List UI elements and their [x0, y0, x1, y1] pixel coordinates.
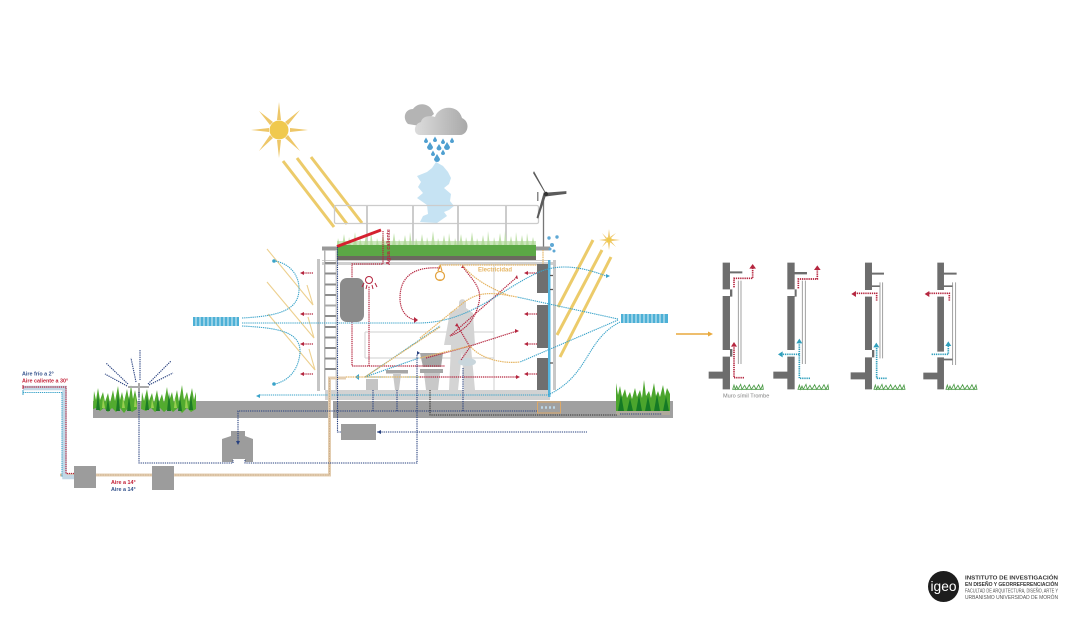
hot water circuit [352, 231, 518, 377]
sink [458, 358, 476, 366]
label: hot air: Aire caliente a 30° [22, 378, 68, 384]
green roof [322, 231, 556, 265]
filter in ground [538, 402, 560, 413]
sun rays onto facade [557, 240, 611, 357]
geothermal box 2 [152, 466, 174, 490]
water cistern [222, 431, 253, 462]
label: air at 14 blue: Aire a 14° [111, 487, 136, 493]
person silhouette [444, 299, 475, 390]
ground slab [93, 401, 673, 418]
floor slab [325, 390, 550, 400]
toilet [420, 353, 443, 390]
navy water lines [139, 247, 662, 463]
icon: light bulb [436, 266, 444, 280]
icon: rain cloud [405, 104, 468, 162]
right air intake [621, 314, 668, 323]
right grass [616, 380, 670, 415]
navy arrowheads [236, 351, 420, 445]
right air intake stripes [624, 314, 664, 323]
blue arrowheads [256, 259, 610, 398]
left air pipe [23, 385, 75, 477]
electricity wiring [440, 250, 543, 265]
orange arrow to details [676, 332, 713, 336]
logo: igeo [928, 571, 959, 602]
small drain box [366, 379, 378, 390]
water tank [340, 278, 364, 322]
label: air at 14 red: Aire a 14° [111, 480, 136, 486]
icon: large sun [251, 102, 308, 158]
logo: igeo: igeo [930, 578, 957, 594]
institute name: EN DISEÑO Y GEORREFERENCIACIÓN [965, 580, 1058, 588]
red arrowheads interior [414, 265, 520, 379]
blue air flows [242, 261, 620, 395]
label: hot water: Agua caliente [386, 229, 392, 265]
panel: Trombe wall detail 1 [709, 263, 763, 389]
institute name: INSTITUTO DE INVESTIGACIÓN [965, 574, 1058, 582]
red interior air flows [400, 267, 517, 360]
water stream [417, 162, 454, 223]
black drain line [430, 390, 617, 415]
institute name: URBANISMO UNIVERSIDAD DE MORÓN [965, 594, 1058, 601]
red heat arrows left [300, 271, 313, 376]
icon: wind turbine [534, 172, 566, 248]
icon: small sun [599, 229, 620, 250]
red heat arrows right [524, 271, 537, 376]
panel: Trombe wall detail 3 [851, 263, 905, 389]
interior window lines [365, 262, 494, 390]
icon: sprinkler [105, 350, 173, 397]
institute name [965, 574, 1059, 601]
right facade [537, 260, 556, 397]
panel: Trombe wall detail 4 [923, 263, 977, 389]
icon: shower [362, 276, 377, 289]
rooftop railing [334, 206, 538, 247]
label: cold air: Aire frío a 2° [22, 372, 54, 378]
bench [386, 370, 408, 390]
beige ground-air duct [60, 378, 346, 475]
solar collector [337, 230, 381, 246]
left reflected sun lines [267, 249, 315, 370]
pump box [341, 424, 376, 440]
left air intake stripes [196, 317, 236, 326]
sun rays onto roof [283, 157, 362, 227]
institute name: FACULTAD DE ARQUITECTURA, DISEÑO, ARTE Y [965, 588, 1059, 594]
left facade [317, 250, 337, 391]
left air intake [193, 317, 239, 326]
geothermal box 1 [74, 466, 96, 488]
label: Trombe wall: Muro símil Trombe [723, 394, 769, 400]
panel: Trombe wall detail 2 [773, 263, 829, 389]
label: electricity: Electricidad [478, 268, 512, 274]
left grass [93, 385, 196, 413]
orange flows [345, 266, 520, 377]
water drops on wall [547, 235, 559, 252]
